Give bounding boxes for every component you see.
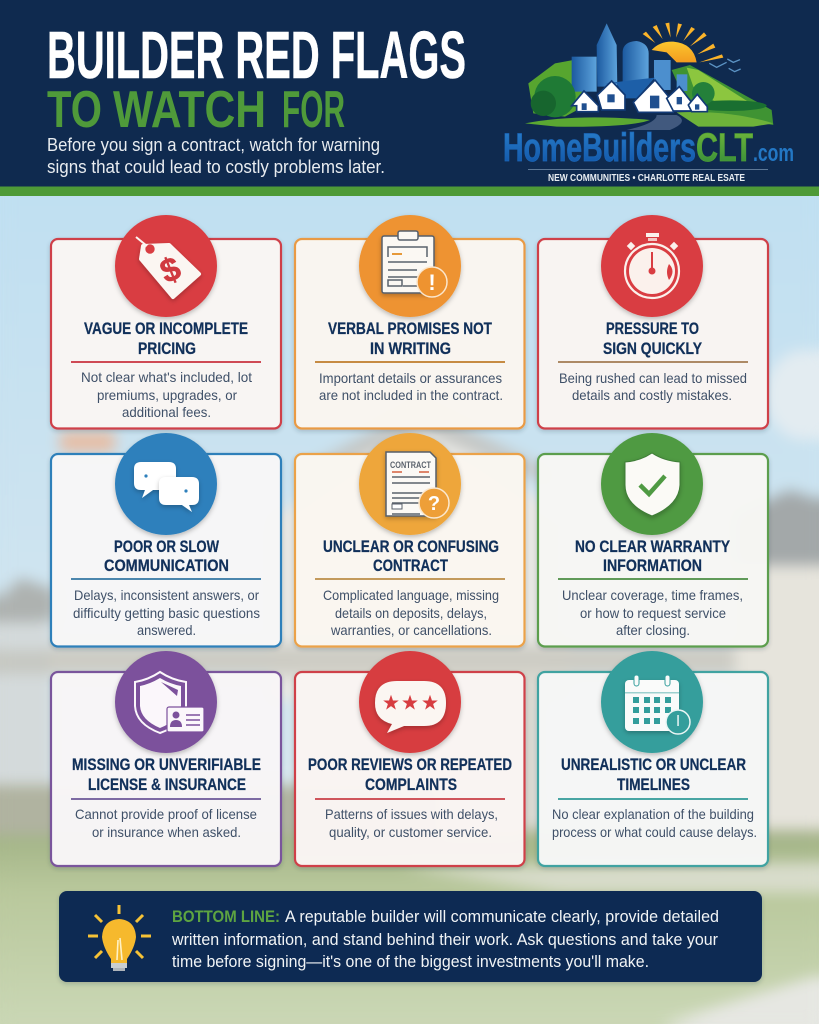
logo illustration bbox=[525, 23, 773, 130]
text: written information, and stand behind their work. Ask questions and take your bbox=[171, 930, 718, 949]
icon: chat bubbles bbox=[115, 433, 217, 535]
description: additional fees. bbox=[122, 405, 211, 420]
heading: VAGUE OR INCOMPLETE bbox=[84, 320, 248, 338]
heading: NO CLEAR WARRANTY bbox=[575, 538, 730, 556]
icon: shield with ID card bbox=[115, 651, 217, 753]
description: Not clear what's included, lot bbox=[81, 370, 252, 385]
description: details on deposits, delays, bbox=[335, 606, 487, 621]
heading: LICENSE & INSURANCE bbox=[88, 776, 246, 794]
description bbox=[75, 807, 257, 840]
heading bbox=[104, 538, 229, 575]
description: quality, or customer service. bbox=[329, 825, 492, 840]
panel: poor or slow communication bbox=[51, 433, 281, 646]
heading: TIMELINES bbox=[617, 776, 690, 794]
description: Being rushed can lead to missed bbox=[559, 371, 747, 386]
subtitle: signs that could lead to costly problems later. bbox=[47, 156, 385, 177]
description: No clear explanation of the building bbox=[552, 807, 754, 822]
text: A reputable builder will communicate clearly, provide detailed bbox=[285, 907, 719, 926]
icon: contract with question mark: CONTRACT bbox=[390, 460, 431, 470]
panel: vague or incomplete pricing bbox=[51, 215, 281, 428]
heading bbox=[328, 320, 492, 358]
heading: MISSING OR UNVERIFIABLE bbox=[72, 756, 261, 774]
description bbox=[559, 371, 747, 403]
panel: unrealistic or unclear timelines bbox=[538, 651, 768, 866]
description: warranties, or cancellations. bbox=[330, 623, 492, 638]
description: or insurance when asked. bbox=[92, 825, 241, 840]
title bbox=[47, 18, 466, 139]
icon: calendar with clock bbox=[601, 651, 703, 753]
icon: price tag: $ bbox=[155, 249, 186, 290]
description: or how to request service bbox=[580, 606, 726, 621]
title: TO bbox=[47, 81, 102, 139]
heading bbox=[84, 320, 248, 358]
description: Patterns of issues with delays, bbox=[325, 807, 498, 822]
accent stripe bbox=[0, 186, 819, 196]
description bbox=[81, 370, 252, 420]
description: Delays, inconsistent answers, or bbox=[74, 588, 259, 603]
heading bbox=[323, 538, 499, 575]
icon: contract with question mark: ? bbox=[428, 493, 440, 515]
subtitle: Before you sign a contract, watch for warning bbox=[47, 134, 380, 155]
heading bbox=[72, 756, 261, 794]
heading: UNREALISTIC OR UNCLEAR bbox=[561, 756, 746, 774]
heading: INFORMATION bbox=[603, 557, 702, 575]
panel: no clear warranty information bbox=[538, 433, 768, 646]
title: BUILDER RED FLAGS bbox=[47, 18, 466, 93]
heading: CONTRACT bbox=[373, 557, 448, 575]
panel: verbal promises not in writing bbox=[295, 215, 524, 428]
panel: poor reviews or repeated complaints bbox=[295, 651, 524, 866]
icon: contract with question mark bbox=[359, 433, 461, 535]
icon: clipboard with alert: ! bbox=[428, 270, 436, 295]
description: answered. bbox=[137, 623, 196, 638]
panel: pressure to sign quickly bbox=[538, 215, 768, 428]
heading bbox=[561, 756, 746, 794]
icon: review bubble with stars bbox=[359, 651, 461, 753]
icon: stopwatch bbox=[601, 215, 703, 317]
subtitle bbox=[47, 134, 385, 177]
heading: UNCLEAR OR CONFUSING bbox=[323, 538, 499, 556]
description bbox=[73, 588, 260, 638]
description: Important details or assurances bbox=[319, 371, 502, 386]
header band bbox=[0, 0, 819, 196]
heading bbox=[575, 538, 730, 575]
text bbox=[171, 907, 719, 971]
logo wordmark: HomeBuilders bbox=[503, 126, 696, 170]
description: are not included in the contract. bbox=[319, 388, 503, 403]
description: Complicated language, missing bbox=[323, 588, 499, 603]
logo wordmark: CLT bbox=[696, 126, 753, 170]
heading: SIGN QUICKLY bbox=[603, 340, 702, 358]
title: WATCH bbox=[113, 81, 266, 139]
logo tagline: NEW COMMUNITIES • CHARLOTTE REAL ESATE bbox=[548, 172, 745, 184]
description: process or what could cause delays. bbox=[552, 825, 757, 840]
heading: COMMUNICATION bbox=[104, 557, 229, 575]
description bbox=[552, 807, 757, 840]
heading: VERBAL PROMISES NOT bbox=[328, 320, 492, 338]
description: Unclear coverage, time frames, bbox=[562, 588, 743, 603]
description bbox=[319, 371, 503, 403]
icon: clipboard with alert bbox=[359, 215, 461, 317]
icon: shield with check bbox=[601, 433, 703, 535]
heading: PRICING bbox=[138, 340, 196, 358]
heading bbox=[308, 756, 512, 794]
logo wordmark: .com bbox=[753, 140, 794, 167]
heading: PRESSURE TO bbox=[606, 320, 699, 338]
icon: light bulb bbox=[88, 905, 151, 971]
description: difficulty getting basic questions bbox=[73, 606, 260, 621]
description bbox=[562, 588, 743, 638]
logo: HomeBuildersCLT bbox=[503, 23, 794, 184]
description: details and costly mistakes. bbox=[572, 388, 732, 403]
callout: bottom line bbox=[59, 891, 762, 982]
icon: price tag bbox=[115, 215, 217, 317]
description bbox=[325, 807, 498, 840]
heading: COMPLAINTS bbox=[365, 776, 457, 794]
heading bbox=[603, 320, 702, 358]
description bbox=[323, 588, 499, 638]
description: Cannot provide proof of license bbox=[75, 807, 257, 822]
description: premiums, upgrades, or bbox=[97, 388, 237, 403]
description: after closing. bbox=[616, 623, 690, 638]
text: time before signing—it's one of the biggest investments you'll make. bbox=[172, 952, 649, 971]
heading: IN WRITING bbox=[370, 340, 451, 358]
text: BOTTOM LINE: bbox=[172, 907, 280, 926]
heading: POOR OR SLOW bbox=[114, 538, 219, 556]
title: FOR bbox=[282, 81, 345, 139]
heading: POOR REVIEWS OR REPEATED bbox=[308, 756, 512, 774]
panel: missing or unverifiable license and insurance bbox=[51, 651, 281, 866]
panel: unclear or confusing contract bbox=[295, 433, 524, 646]
